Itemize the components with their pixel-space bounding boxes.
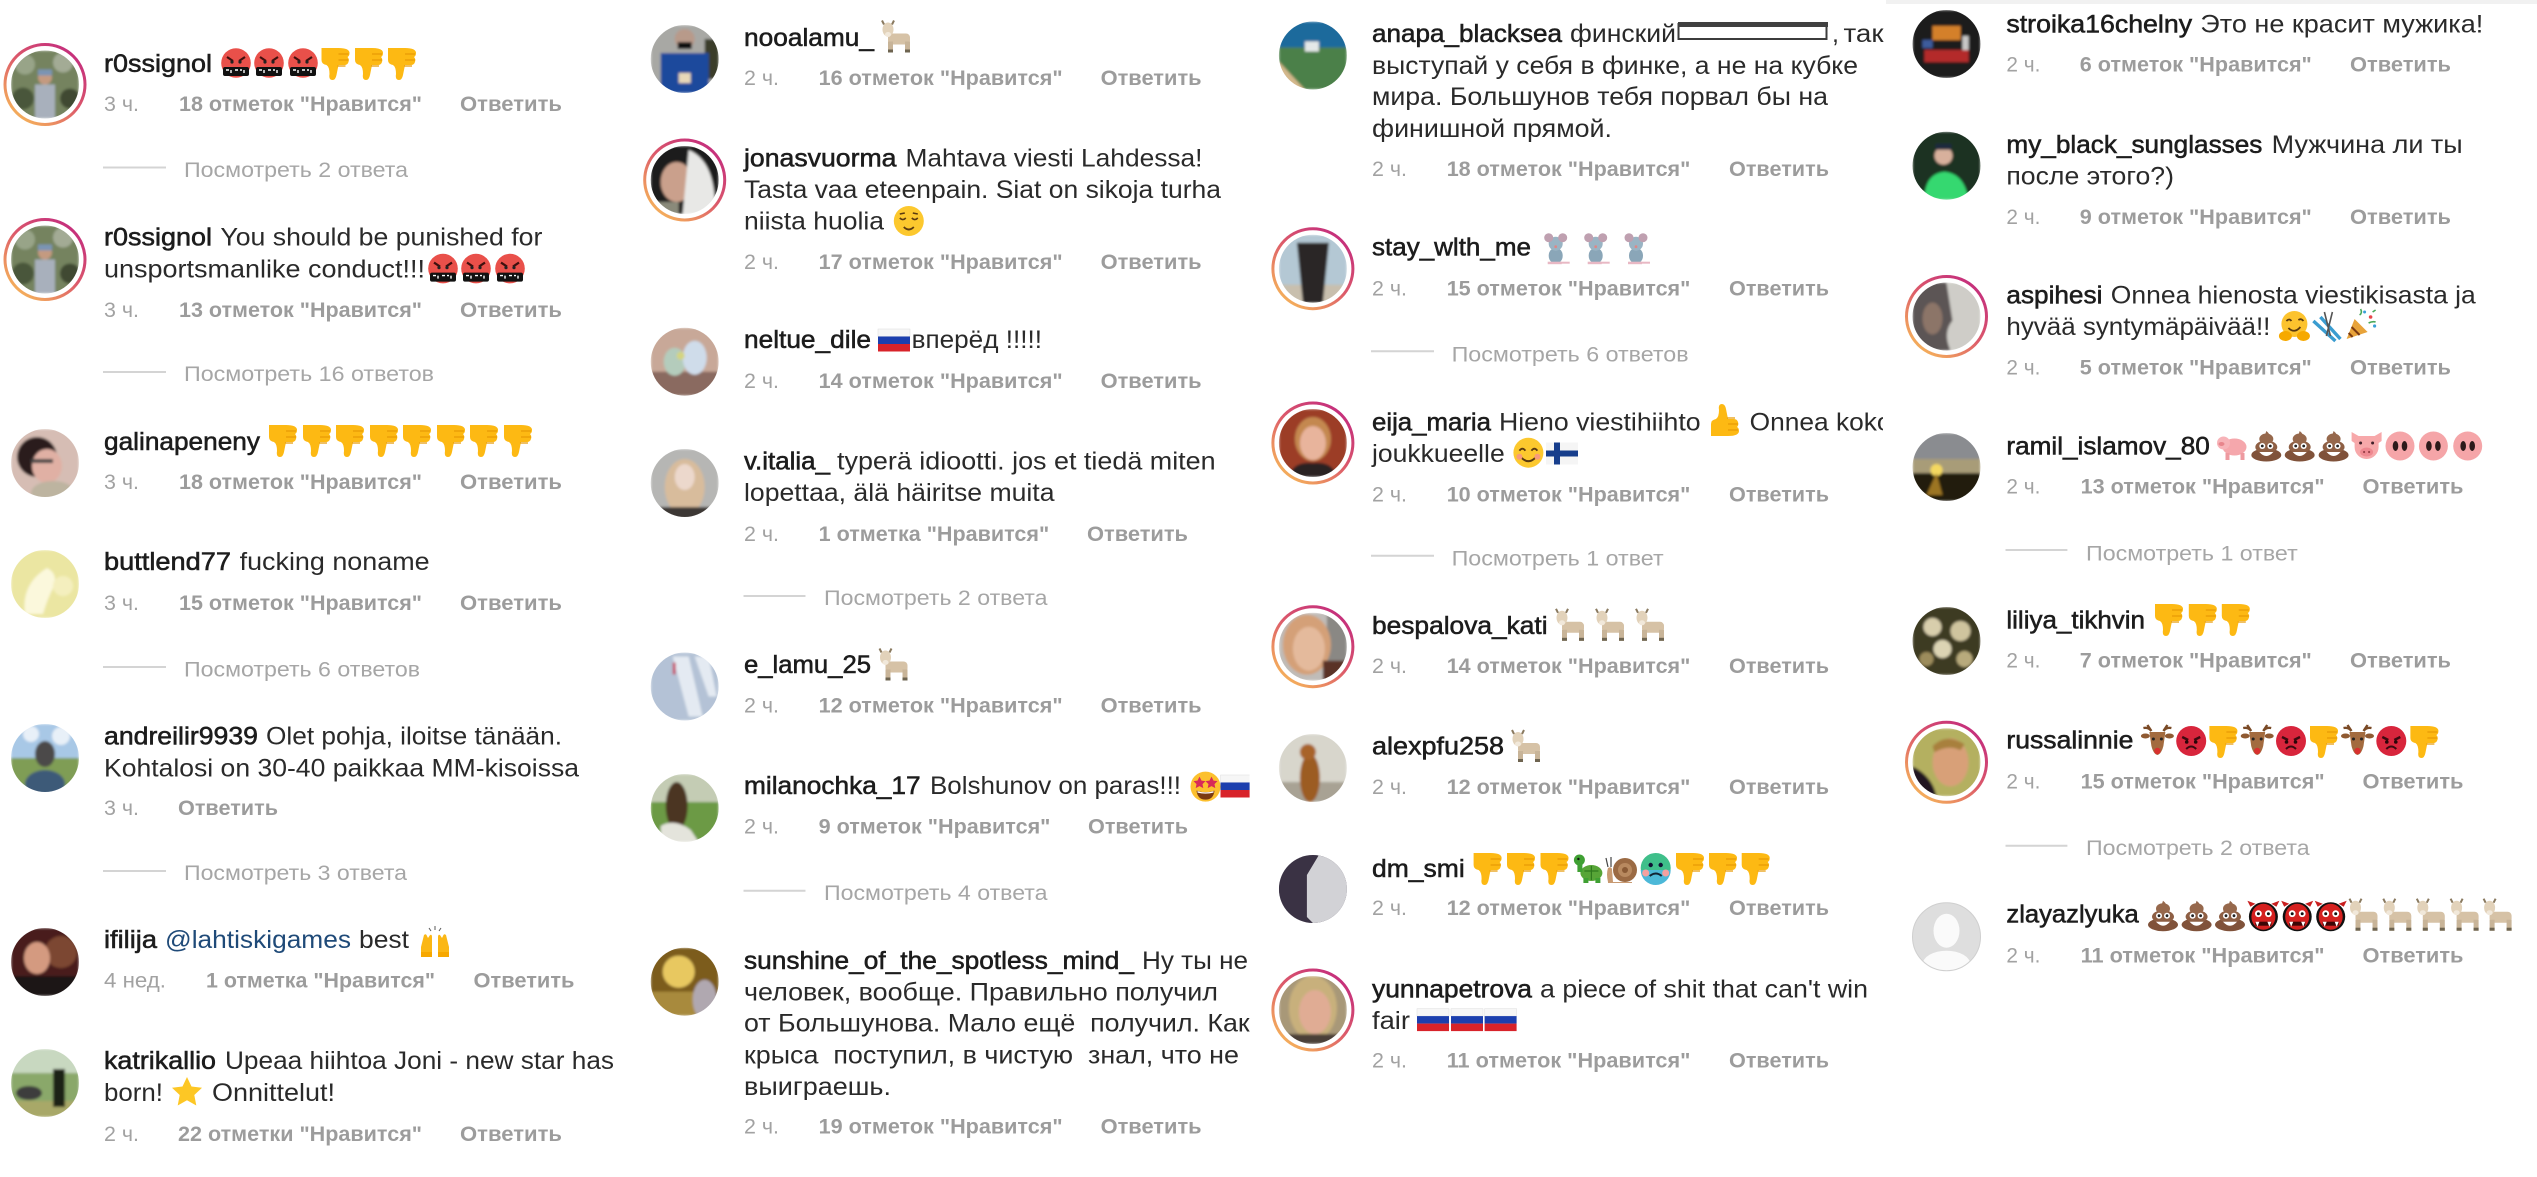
comment text: Ну ты не [1142, 947, 1248, 975]
comment text: joukkueelle [1371, 440, 1505, 468]
meta row [104, 591, 562, 615]
meta row: 12 отметок "Нравится" [819, 694, 1063, 718]
meta row: 2 ч. [1372, 654, 1407, 678]
comment text: niista huolia [744, 208, 884, 236]
comment text: @lahtiskigames [165, 926, 351, 954]
comment text [2006, 131, 2463, 190]
view replies: Посмотреть 2 ответа [2086, 836, 2310, 860]
meta row: Ответить [460, 298, 562, 322]
comment: katrikallio [11, 1047, 614, 1146]
meta row [1372, 157, 1829, 181]
emoji row [2279, 309, 2376, 341]
view replies: Посмотреть 2 ответа [824, 586, 1048, 610]
comment text: born! [104, 1079, 163, 1107]
comment: andreilir9939 [11, 723, 579, 820]
comment text: Bolshunov on paras!!! [930, 772, 1181, 800]
comment text: fucking noname [240, 548, 430, 576]
comment text [744, 448, 1216, 507]
comment text: Olet pohja, iloitse tänään. [266, 723, 562, 751]
comment text [2006, 10, 2483, 38]
meta row: 9 отметок "Нравится" [2080, 205, 2312, 229]
comment text [2006, 282, 2476, 341]
meta row: Ответить [2350, 355, 2451, 379]
comment: e_lamu_25 [651, 648, 1202, 720]
meta row: Ответить [178, 796, 278, 820]
meta row: 2 ч. [2006, 649, 2040, 673]
avatar: buttlend77 [11, 550, 79, 618]
emoji row [2141, 725, 2438, 758]
comment text: r0ssignol [104, 224, 212, 252]
comment text: buttlend77 [104, 548, 231, 576]
avatar: stay_wlth_me [1273, 229, 1353, 309]
avatar: nooalamu_ [651, 25, 719, 93]
comment text: fair [1372, 1007, 1410, 1035]
meta row [744, 1115, 1202, 1139]
comment text: финский [1570, 20, 1676, 48]
emoji row [1556, 609, 1664, 641]
panel: comments column 1 [5, 44, 614, 1146]
meta row [2006, 355, 2451, 379]
avatar: my_black_sunglasses [1912, 132, 1980, 200]
emoji row [2148, 899, 2512, 931]
meta row: 3 ч. [104, 298, 139, 322]
meta row: Ответить [1729, 654, 1829, 678]
avatar: andreilir9939 [11, 724, 79, 798]
comment text: мира. Большунов тебя порвал бы на [1372, 83, 1828, 111]
comment text: anapa_blacksea [1372, 20, 1562, 48]
comment text: jonasvuorma [743, 144, 897, 172]
view replies: Посмотреть 1 ответ [2086, 542, 2298, 566]
emoji row [2217, 431, 2482, 462]
comment text: neltue_dile [744, 326, 871, 354]
comment: yunnapetrova [1273, 970, 1868, 1072]
meta row [1372, 482, 1829, 506]
avatar: aspihesi [1906, 276, 1986, 356]
comment text: best [359, 926, 409, 954]
meta row [744, 815, 1188, 839]
meta row: Ответить [1729, 775, 1829, 799]
comment text [104, 224, 542, 284]
emoji row [1474, 853, 1770, 885]
meta row [2006, 769, 2464, 793]
meta row [104, 470, 562, 494]
top shadow of screenshot 4 [1886, 0, 2537, 4]
meta row: 3 ч. [104, 470, 139, 494]
comment: galinapeneny [11, 425, 561, 497]
meta row: 7 отметок "Нравится" [2080, 649, 2312, 673]
meta row: Ответить [2362, 769, 2464, 793]
username: zlayazlyuka [2006, 901, 2139, 929]
avatar: galinapeneny [11, 429, 79, 497]
comment text: yunnapetrova [1372, 976, 1532, 1004]
comment text [743, 144, 1221, 236]
meta row: 3 ч. [104, 92, 139, 116]
view replies: Посмотреть 2 ответа [184, 158, 408, 182]
meta row: Ответить [1101, 66, 1202, 90]
comment text: Hieno viestihiihto [1499, 408, 1701, 436]
meta row: 19 отметок "Нравится" [819, 1115, 1063, 1139]
view replies: Посмотреть 1 ответ [1452, 547, 1664, 571]
username: galinapeneny [104, 428, 261, 456]
emoji: goat [882, 20, 910, 52]
comment: eija_maria [1273, 403, 1892, 506]
comment: stroika16chelny [1912, 10, 2483, 78]
meta row [2006, 649, 2451, 673]
avatar: dm_smi [1279, 855, 1349, 923]
comment: bespalova_kati [1273, 607, 1829, 687]
meta row: Ответить [474, 969, 574, 993]
meta row: Ответить [1729, 1048, 1829, 1072]
meta row: 11 отметок "Нравится" [1447, 1048, 1690, 1072]
comment text: Это не красит мужика! [2200, 10, 2483, 38]
username: r0ssignol [104, 50, 212, 78]
avatar: liliya_tikhvin [1912, 607, 1980, 675]
meta row [104, 796, 278, 820]
meta row [2006, 205, 2451, 229]
meta row: 2 ч. [1372, 896, 1407, 920]
meta row: 2 ч. [2006, 475, 2040, 499]
meta row: 18 отметок "Нравится" [1447, 157, 1690, 181]
meta row: 2 ч. [744, 66, 779, 90]
meta row: 12 отметок "Нравится" [1447, 896, 1690, 920]
username: e_lamu_25 [744, 651, 871, 679]
comment text [744, 947, 1251, 1101]
comment text: Onnittelut! [212, 1079, 335, 1107]
meta row: 9 отметок "Нравится" [819, 815, 1050, 839]
view replies: Посмотреть 6 ответов [1452, 343, 1689, 367]
comment text [744, 772, 1181, 800]
meta row: 2 ч. [744, 694, 779, 718]
comment: neltue_dile [651, 326, 1202, 396]
comment: alexpfu258 [1279, 730, 1829, 802]
emoji row [1190, 772, 1252, 802]
meta row [2006, 475, 2464, 499]
meta row: 14 отметок "Нравится" [1447, 654, 1690, 678]
meta row: 15 отметок "Нравится" [179, 591, 422, 615]
meta row [104, 1122, 562, 1146]
emoji row [1544, 233, 1650, 264]
meta row: 2 ч. [1372, 1048, 1407, 1072]
redaction box [1678, 22, 1828, 39]
emoji: russian flag [878, 329, 910, 352]
meta row [1372, 654, 1829, 678]
meta row [1372, 276, 1829, 300]
username: bespalova_kati [1372, 612, 1548, 640]
comment text: Tasta vaa eteenpain. Siat on sikoja turha [744, 176, 1221, 204]
emoji row: flags [1417, 1009, 1517, 1031]
view replies: Посмотреть 4 ответа [824, 881, 1048, 905]
comment text: milanochka_17 [744, 772, 921, 800]
avatar: ifilija [11, 928, 79, 996]
comment text: Onnea koko [1750, 408, 1892, 436]
comment text [1372, 20, 1885, 143]
meta row: Ответить [1729, 482, 1829, 506]
meta row [104, 92, 562, 116]
meta row: Ответить [1101, 250, 1202, 274]
avatar: v.italia_ [651, 449, 719, 519]
meta row: 2 ч. [744, 1115, 779, 1139]
meta row [2006, 943, 2464, 967]
avatar: eija_maria [1273, 403, 1353, 483]
meta row: Ответить [1087, 522, 1188, 546]
meta row: 18 отметок "Нравится" [179, 470, 422, 494]
meta row: Ответить [1101, 369, 1202, 393]
comment text: You should be punished for [220, 224, 542, 252]
meta row: 16 отметок "Нравится" [819, 66, 1063, 90]
comment text: вперёд !!!!! [912, 326, 1042, 354]
avatar: sunshine [651, 948, 719, 1020]
avatar: jonasvuorma [645, 140, 725, 220]
avatar: milanochka_17 [651, 774, 719, 842]
comment text: , [1832, 20, 1839, 48]
meta row: 17 отметок "Нравится" [819, 250, 1063, 274]
username: ramil_islamov_80 [2006, 432, 2210, 460]
comment text: Мужчина ли ты [2272, 131, 2463, 159]
username: nooalamu_ [744, 24, 875, 52]
comment text: aspihesi [2006, 282, 2102, 310]
meta row: 1 отметка "Нравится" [819, 522, 1049, 546]
meta row: 2 ч. [2006, 769, 2040, 793]
emoji: goat [1512, 730, 1540, 762]
meta row: 2 ч. [1372, 157, 1407, 181]
comment text: katrikallio [104, 1047, 216, 1075]
meta row: 5 отметок "Нравится" [2080, 355, 2312, 379]
avatar: r0ssignol [5, 44, 85, 124]
comment text: stroika16chelny [2006, 10, 2193, 38]
comment text [104, 723, 579, 783]
meta row: Ответить [1088, 815, 1188, 839]
comment text: my_black_sunglasses [2006, 131, 2262, 159]
meta row [1372, 775, 1829, 799]
comment text [104, 926, 409, 954]
meta row: Ответить [2350, 649, 2451, 673]
meta row [744, 694, 1202, 718]
meta row: Ответить [1729, 157, 1829, 181]
comment: dm_smi [1279, 853, 1829, 923]
meta row: Ответить [460, 92, 562, 116]
meta row: 2 ч. [1372, 482, 1407, 506]
meta row: 6 отметок "Нравится" [2080, 53, 2312, 77]
comment text: hyvää syntymäpäivää!! [2006, 313, 2270, 341]
meta row: Ответить [1729, 896, 1829, 920]
comment: r0ssignol angry [5, 44, 562, 124]
meta row: 2 ч. [1372, 775, 1407, 799]
meta row: 2 ч. [1372, 276, 1407, 300]
meta row: 3 ч. [104, 796, 139, 820]
username: liliya_tikhvin [2006, 606, 2145, 634]
comment: aspihesi [1906, 276, 2476, 379]
comment: v.italia_ [651, 448, 1216, 546]
meta row [744, 66, 1202, 90]
meta row: Ответить [460, 591, 562, 615]
comment text: выиграешь. [744, 1073, 891, 1101]
comment text: от Большунова. Мало ещё получил. Как [744, 1010, 1251, 1038]
meta row: 22 отметки "Нравится" [178, 1122, 422, 1146]
comment text: выступай у себя в финке, а не на кубке [1372, 52, 1858, 80]
emoji: goat [880, 648, 908, 680]
comment: jonasvuorma [645, 140, 1221, 274]
comment: ramil_islamov_80 [1912, 431, 2482, 501]
emoji row [428, 254, 525, 283]
emoji row [2155, 604, 2250, 636]
meta row: 1 отметка "Нравится" [206, 969, 435, 993]
view replies: Посмотреть 6 ответов [184, 658, 420, 682]
avatar: r0ssignol [5, 220, 85, 300]
comment: ifilija [11, 926, 574, 996]
comment text: andreilir9939 [104, 723, 258, 751]
emoji: relieved [894, 206, 924, 236]
meta row: 2 ч. [744, 250, 779, 274]
comment: stay_wlth_me [1273, 229, 1829, 309]
meta row: 2 ч. [2006, 205, 2040, 229]
comment: zlayazlyuka [1912, 899, 2512, 979]
avatar: anapa_blacksea [1279, 22, 1347, 90]
comment text: unsportsmanlike conduct!!! [104, 256, 425, 284]
comment text: sunshine_of_the_spotless_mind_ [744, 947, 1135, 975]
comment text: Onnea hienosta viestikisasta ja [2111, 282, 2476, 310]
username: russalinnie [2006, 726, 2133, 754]
emoji: raised hands [421, 926, 449, 957]
meta row: 2 ч. [744, 815, 779, 839]
comment text: крыса поступил, в чистую знал, что не [744, 1042, 1239, 1070]
avatar: yunnapetrova [1273, 970, 1353, 1050]
comment: liliya_tikhvin [1912, 604, 2451, 675]
comment text: lopettaa, älä häiritse muita [744, 479, 1055, 507]
comment text [1372, 976, 1868, 1035]
username: alexpfu258 [1372, 733, 1504, 761]
meta row: 3 ч. [104, 591, 139, 615]
meta row: 2 ч. [744, 522, 779, 546]
meta row: 14 отметок "Нравится" [819, 369, 1063, 393]
meta row [744, 522, 1188, 546]
view replies: Посмотреть 3 ответа [184, 861, 407, 885]
meta row: 18 отметок "Нравится" [179, 92, 422, 116]
comment text [104, 548, 430, 576]
meta row: Ответить [1101, 1115, 1202, 1139]
comment text: после этого?) [2006, 162, 2174, 190]
meta row: Ответить [2362, 943, 2464, 967]
comment: nooalamu_ [651, 20, 1202, 93]
avatar: katrikallio [11, 1049, 79, 1117]
meta row: 2 ч. [2006, 53, 2040, 77]
meta row: 2 ч. [2006, 355, 2040, 379]
avatar: stroika16chelny [1912, 10, 1980, 78]
comment text: человек, вообще. Правильно получил [744, 978, 1218, 1006]
comment: buttlend77 [11, 548, 562, 618]
meta row: Ответить [460, 470, 562, 494]
meta row [744, 250, 1202, 274]
emoji row [1513, 404, 1739, 468]
comment text: a piece of shit that can't win [1540, 976, 1868, 1004]
meta row: 4 нед. [104, 969, 166, 993]
view replies: Посмотреть 16 ответов [184, 362, 434, 386]
panel: comments column 4 [1906, 10, 2512, 979]
meta row: 10 отметок "Нравится" [1447, 482, 1690, 506]
username: dm_smi [1372, 855, 1465, 883]
meta row [744, 369, 1202, 393]
meta row: 11 отметок "Нравится" [2081, 943, 2325, 967]
username: stay_wlth_me [1372, 234, 1531, 262]
avatar: alexpfu258 [1279, 734, 1347, 802]
meta row: Ответить [1729, 276, 1829, 300]
meta row: 2 ч. [104, 1122, 139, 1146]
meta row: Ответить [2350, 205, 2451, 229]
comment text [1371, 408, 1892, 468]
comment: russalinnie [1906, 722, 2464, 802]
meta row [2006, 53, 2451, 77]
avatar: russalinnie [1906, 722, 1986, 802]
comment text: typerä idiootti. jos et tiedä miten [837, 448, 1216, 476]
meta row: Ответить [460, 1122, 562, 1146]
comment: my_black_sunglasses [1912, 131, 2463, 229]
meta row: 2 ч. [2006, 943, 2040, 967]
meta row [104, 298, 562, 322]
meta row: 2 ч. [744, 369, 779, 393]
meta row: Ответить [2350, 53, 2451, 77]
comment: r0ssignol punished [5, 220, 562, 322]
emoji row [221, 48, 416, 80]
panel: comments column 3 [1273, 20, 1892, 1072]
comment text: eija_maria [1372, 408, 1491, 436]
emoji: star [172, 1077, 202, 1106]
comment text: Mahtava viesti Lahdessa! [906, 144, 1202, 172]
comment text [744, 326, 1042, 354]
meta row: 13 отметок "Нравится" [2081, 475, 2325, 499]
comment text: Kohtalosi on 30-40 paikkaa MM-kisoissa [104, 755, 579, 783]
comment text: так [1844, 20, 1885, 48]
comment: anapa_blacksea [1279, 20, 1885, 181]
comment text: финишной прямой. [1372, 115, 1612, 143]
meta row [1372, 896, 1829, 920]
panel: comments column 2 [645, 20, 1252, 1139]
avatar: neltue_dile [651, 328, 719, 396]
meta row [104, 969, 574, 993]
avatar: ramil_islamov_80 [1912, 433, 1980, 501]
meta row: 15 отметок "Нравится" [1447, 276, 1690, 300]
comment text: ifilija [104, 926, 157, 954]
comment text: Upeaa hiihtoa Joni - new star has [225, 1047, 614, 1075]
meta row: 13 отметок "Нравится" [179, 298, 422, 322]
meta row: 12 отметок "Нравится" [1447, 775, 1690, 799]
meta row [1372, 1048, 1829, 1072]
avatar: bespalova_kati [1273, 607, 1353, 687]
comment: milanochka_17 [651, 772, 1252, 842]
comment text [104, 1047, 614, 1107]
avatar: e_lamu_25 [651, 652, 719, 720]
avatar: default silhouette [1912, 903, 1980, 979]
meta row: 15 отметок "Нравится" [2081, 769, 2325, 793]
meta row: Ответить [2362, 475, 2464, 499]
emoji row [269, 425, 532, 457]
meta row: Ответить [1101, 694, 1202, 718]
comment: sunshine_of_the_spotless_mind_ [651, 947, 1251, 1139]
comment text: v.italia_ [744, 448, 831, 476]
